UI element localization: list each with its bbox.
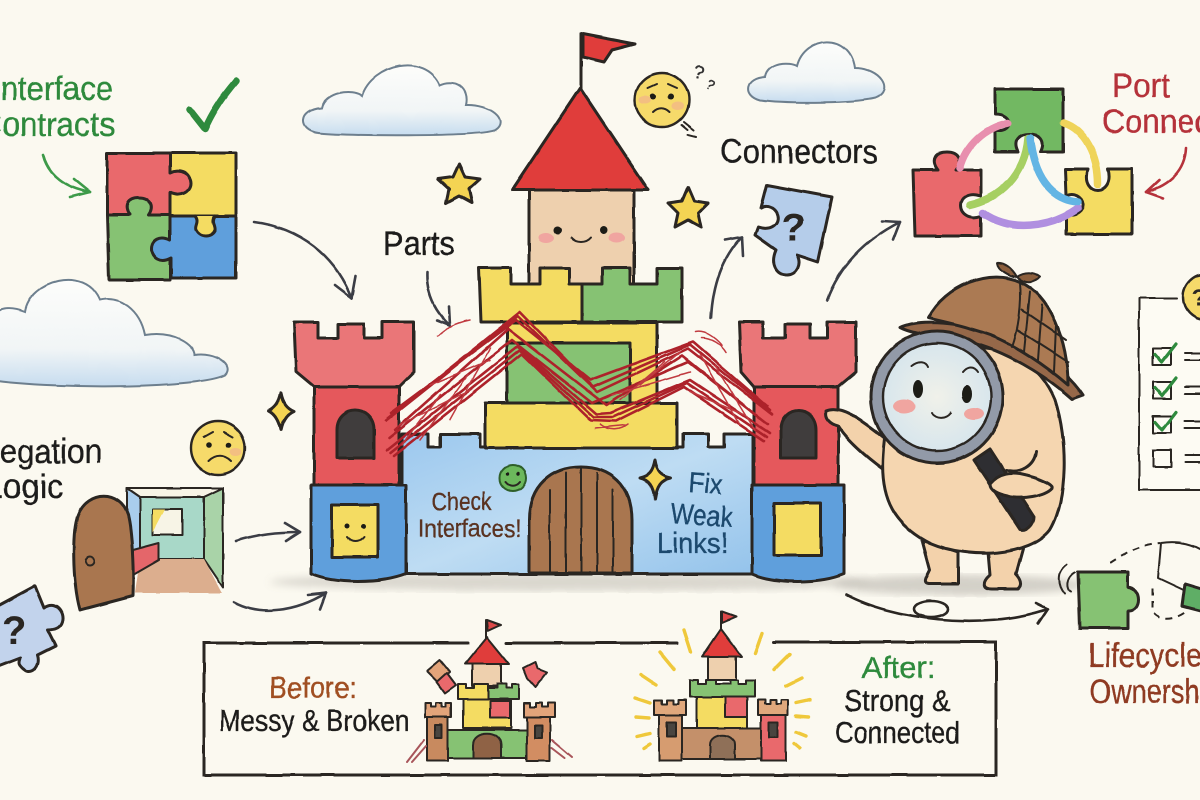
piece: yellow	[170, 153, 236, 216]
checklist card	[1139, 274, 1200, 490]
magnifying glass with face	[871, 331, 1003, 463]
arrow: port connections to pieces	[1146, 148, 1186, 198]
arrow: puzzle to castle	[254, 222, 356, 298]
before text	[219, 670, 409, 738]
left tower smiling yellow window	[332, 505, 378, 557]
dashed outline	[1110, 543, 1186, 619]
wall text: Check Interfaces	[418, 488, 521, 543]
icon: left question puzzle piece	[0, 586, 63, 672]
central wall	[402, 434, 753, 574]
icon: worried face with question marks: ?	[702, 76, 718, 95]
central roof	[512, 88, 648, 190]
arrow: puzzle to castle	[234, 593, 326, 610]
detective character	[826, 263, 1085, 595]
arrow: room to castle	[236, 523, 300, 541]
wall smiley	[500, 465, 526, 491]
heading: Lifecycle Ownership	[1088, 637, 1200, 711]
after text	[835, 650, 960, 750]
right tower yellow window	[774, 503, 821, 555]
wall text: Check Interfaces: Check	[431, 488, 492, 516]
before text: Messy & Broken	[219, 703, 409, 738]
motion marks	[1059, 564, 1075, 594]
left tower	[294, 322, 414, 582]
shadow	[835, 575, 1085, 595]
right tower crown	[739, 322, 856, 387]
castle	[294, 34, 856, 582]
wall text: Check Interfaces: Interfaces!	[418, 515, 521, 543]
right green piece	[1182, 584, 1200, 612]
arrow: contracts to puzzle	[43, 155, 90, 197]
left tower window	[337, 410, 374, 458]
right tower window	[781, 410, 816, 458]
icon: worried face with question marks: ?	[691, 62, 706, 85]
door	[529, 467, 632, 573]
lower stack: yellow and green blocks	[485, 323, 677, 448]
after castle glow rays	[635, 630, 810, 748]
sparkle: left of castle	[269, 393, 294, 430]
icon: green check mark	[190, 81, 236, 129]
star: left of tower	[438, 164, 480, 203]
label: Parts: Parts	[383, 225, 455, 263]
yellow piece	[1065, 169, 1132, 234]
right tower blue base	[752, 485, 844, 582]
arrow: parts to castle	[427, 272, 450, 325]
room	[127, 488, 223, 593]
icon: blue question puzzle piece	[755, 185, 832, 275]
white piece	[1158, 542, 1200, 600]
tower crown: yellow	[479, 268, 582, 322]
heading: Port Connections: Port	[1112, 67, 1171, 105]
panel: before and after	[204, 612, 996, 775]
wall text: Fix Weak Links: Links!	[657, 528, 728, 560]
icon: connected puzzle pieces	[913, 89, 1132, 236]
heading: Interface Contracts	[0, 70, 115, 144]
heading: Delegation Logic	[0, 433, 102, 506]
green piece	[995, 89, 1063, 152]
central tower with face	[529, 188, 634, 284]
check items	[1153, 348, 1200, 467]
before text: Before:	[269, 670, 357, 705]
hat	[900, 263, 1083, 399]
legs	[922, 540, 1024, 589]
knob: yellow into blue	[195, 216, 215, 236]
left tower blue base	[311, 485, 406, 582]
worried emoji	[1183, 274, 1200, 320]
arm pointing	[826, 410, 887, 470]
arrow: toward port connections	[827, 221, 900, 300]
cloud: top right	[748, 42, 884, 102]
piece: green	[107, 198, 170, 280]
right tower	[739, 322, 856, 582]
coloured tubes	[960, 123, 1098, 225]
tower crown: green	[582, 268, 682, 322]
ground shadow	[270, 573, 870, 591]
before castle	[407, 620, 572, 762]
label: Connectors: Connectors	[720, 133, 878, 171]
red piece	[913, 152, 981, 236]
after text: After:	[862, 650, 935, 685]
piece: blue	[152, 216, 236, 278]
door	[74, 496, 133, 610]
cloud: left	[0, 280, 228, 386]
after text: Strong &	[844, 683, 950, 718]
wall text: Fix Weak Links: Weak	[670, 498, 734, 534]
icon: worried face	[191, 421, 245, 475]
central flag	[581, 34, 635, 90]
red scribbled weak links	[386, 312, 772, 456]
arrow: toward connectors piece	[711, 237, 743, 318]
icon: lifecycle green puzzle with dashed outline	[1059, 542, 1200, 628]
heading: Port Connections	[1102, 67, 1200, 141]
arrow: castle to lifecycle	[847, 595, 1048, 624]
icon: worried face with question marks	[635, 62, 718, 137]
icon: left question puzzle piece: ?	[2, 609, 26, 653]
icon: blue question puzzle piece: ?	[781, 206, 805, 250]
after castle	[654, 612, 788, 761]
hand and handle	[974, 449, 1052, 530]
wall text: Fix Weak Links	[657, 467, 734, 560]
green piece	[1078, 572, 1138, 628]
cloud: top centre	[303, 65, 500, 135]
star: right of tower	[668, 187, 708, 227]
right tower red body	[754, 387, 838, 485]
piece: red	[107, 153, 191, 215]
icon: four piece puzzle	[107, 153, 236, 280]
icon: room with open door	[74, 488, 223, 610]
body	[883, 348, 1064, 553]
panel border	[204, 642, 996, 775]
left tower crown	[294, 322, 414, 387]
after text: Connected	[835, 715, 960, 750]
wall text: Fix Weak Links: Fix	[688, 467, 724, 501]
left tower red body	[314, 387, 399, 485]
wall sparkle	[640, 460, 671, 499]
